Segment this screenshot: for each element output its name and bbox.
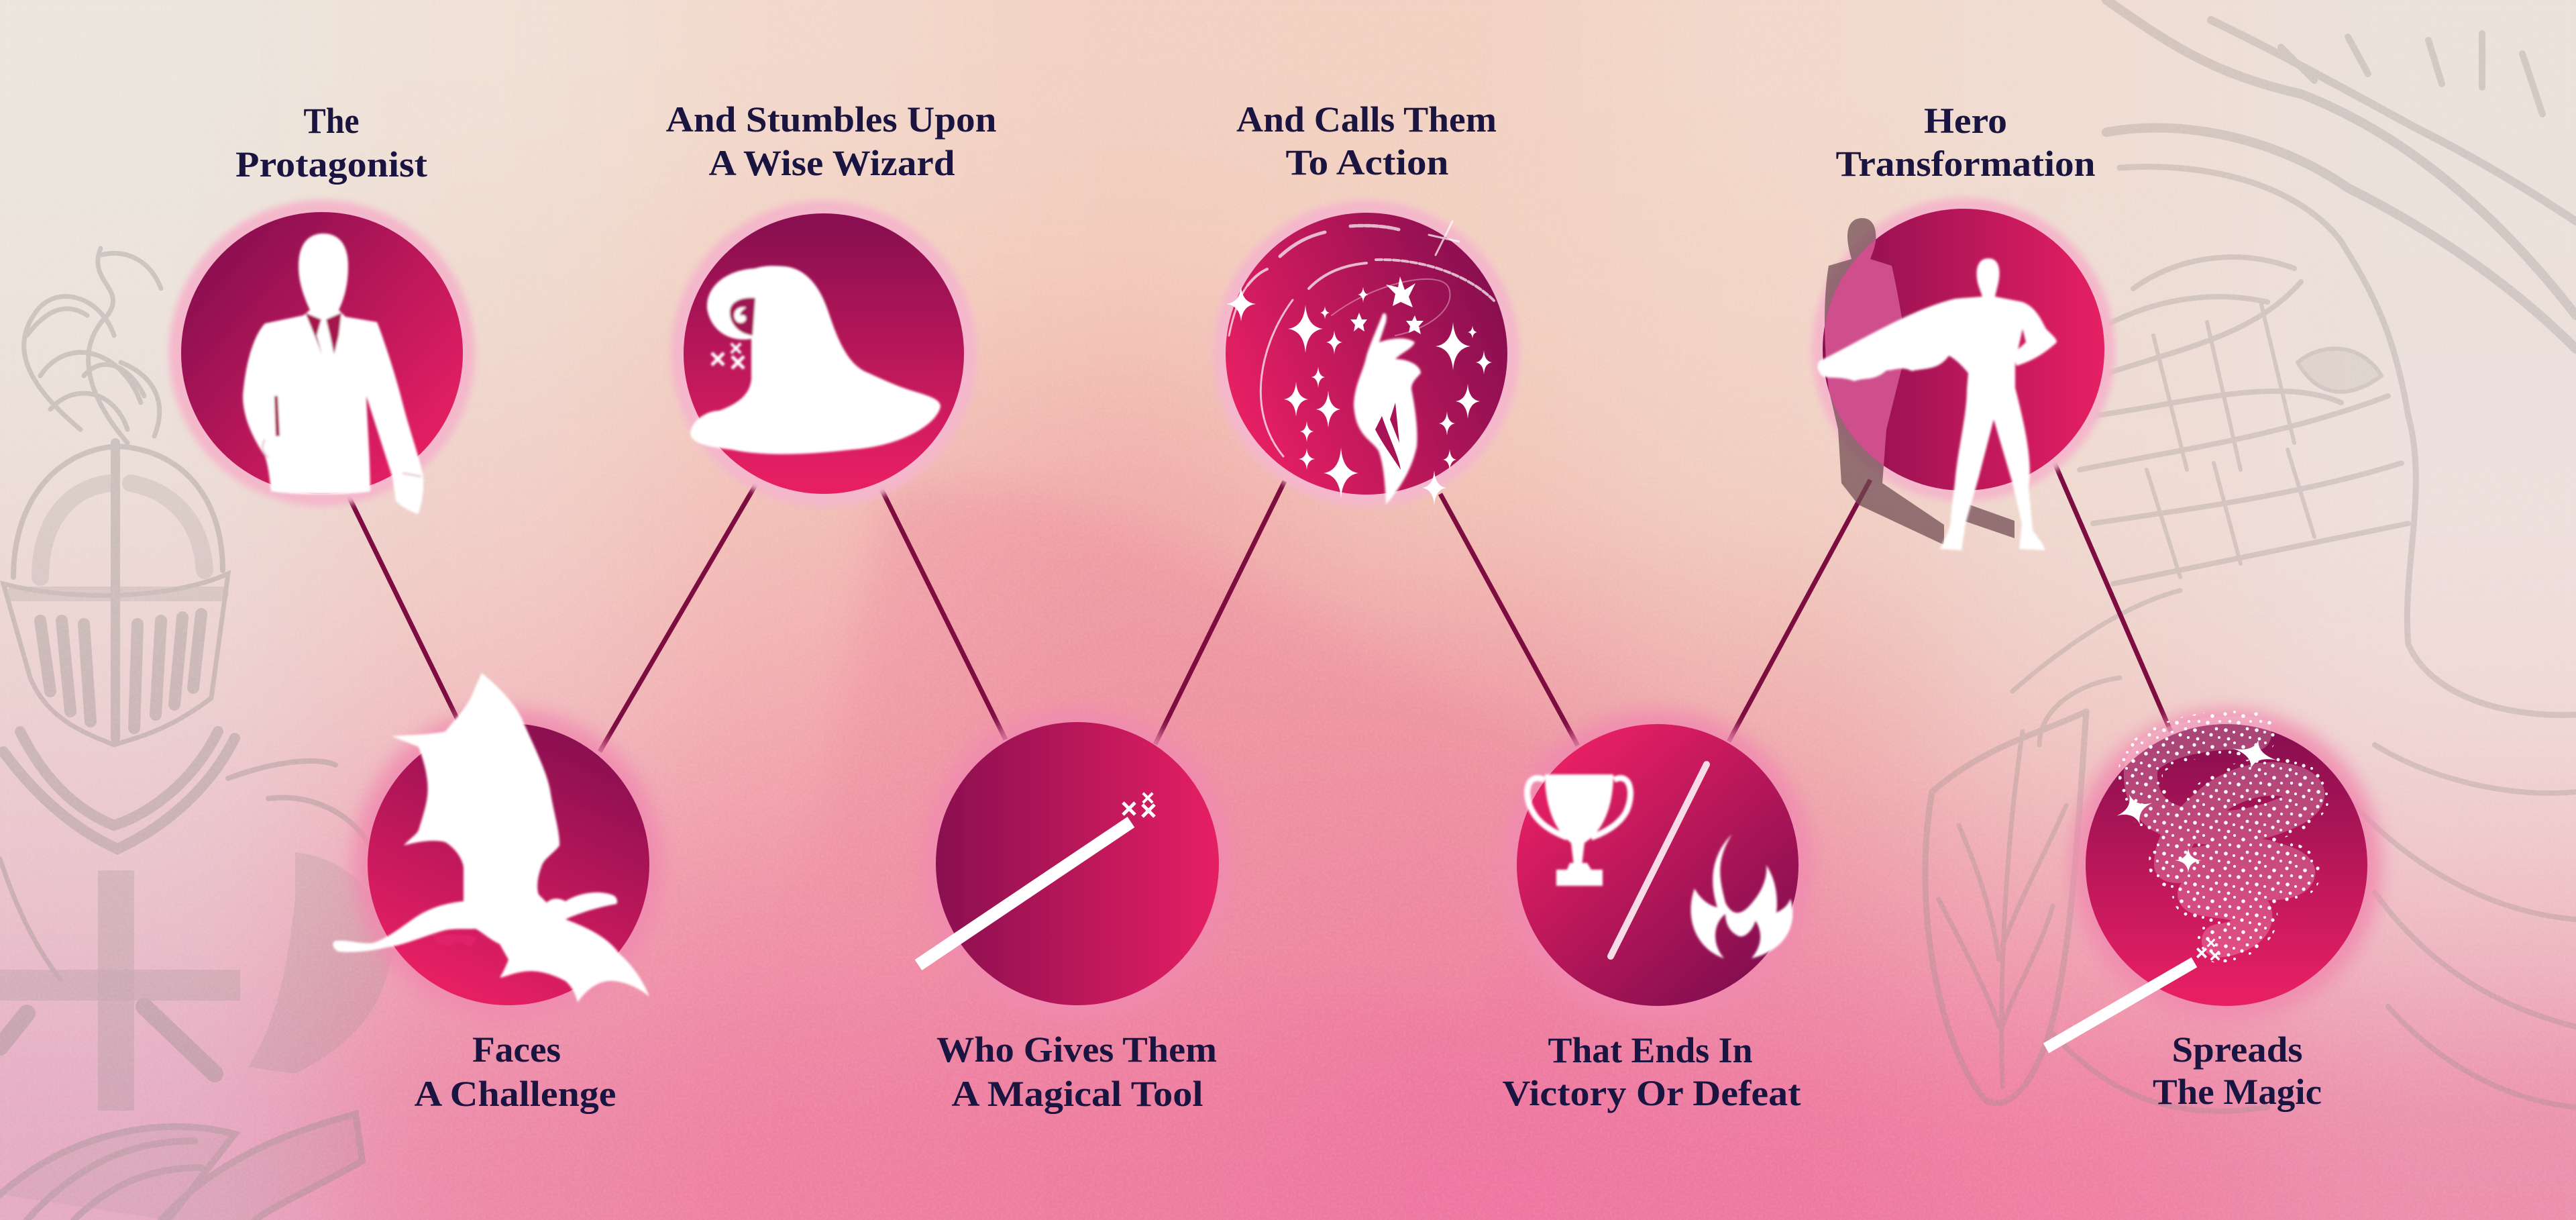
title: who gives them a magical tool: [936, 1029, 1217, 1114]
icon: flying dragon: [333, 673, 649, 1003]
title: the protagonist: The: [303, 101, 360, 141]
step 6: who gives them a magical tool: [918, 708, 1233, 1114]
background: dragon sketch: [1925, 0, 2576, 1111]
step 5: faces a challenge: [333, 673, 664, 1114]
title: that ends in victory or defeat: [1503, 1030, 1801, 1113]
title: hero transformation: Transformation: [1835, 144, 2096, 184]
icon: wizard hat: [690, 266, 941, 454]
icon: wand: [2046, 939, 2219, 1048]
circle badge: [1214, 201, 1519, 507]
title: spreads the magic: Spreads: [2172, 1029, 2302, 1070]
title: and calls them to action: To Action: [1285, 142, 1449, 183]
title: faces a challenge: A Challenge: [415, 1074, 616, 1114]
title: that ends in victory or defeat: That Ends In: [1548, 1030, 1752, 1070]
step 4: hero transformation: [1812, 101, 2115, 550]
circle badge: [353, 709, 664, 1020]
background: knight sketch: [0, 248, 392, 1220]
icon: hand with sparkles: [1226, 276, 1492, 505]
divider slash: [1611, 764, 1707, 956]
title: spreads the magic: [2153, 1029, 2322, 1112]
icon: magic wand: [918, 793, 1155, 965]
title: and calls them to action: [1236, 99, 1497, 183]
step 7: ends in victory or defeat: [1502, 709, 1813, 1113]
icon: man in suit: [243, 234, 423, 514]
circle badge: [922, 708, 1233, 1019]
icon: magic dust swirl: [2111, 733, 2308, 941]
step 8: spreads the magic: [2046, 709, 2382, 1112]
circle badge: [2071, 709, 2382, 1021]
connector lines between story beats: [347, 460, 2171, 752]
title: who gives them a magical tool: Who Gives Them: [936, 1029, 1217, 1070]
title: hero transformation: Hero: [1924, 101, 2007, 141]
title: faces a challenge: Faces: [472, 1029, 561, 1070]
icon: ordinary man's shadow: [1825, 218, 2015, 545]
icon: flames: [1690, 834, 1792, 958]
title: and stumbles upon a wise wizard: A Wise Wizard: [708, 143, 955, 183]
title: who gives them a magical tool: A Magical Tool: [951, 1074, 1203, 1114]
circle badge: [671, 201, 977, 507]
title: spreads the magic: The Magic: [2153, 1072, 2322, 1112]
icon: trophy: [1527, 774, 1630, 886]
step 2: the wise wizard: [665, 99, 997, 507]
title: hero transformation: [1835, 101, 2096, 184]
title: and stumbles upon a wise wizard: [665, 99, 997, 183]
title: the protagonist: Protagonist: [235, 144, 427, 185]
title: and stumbles upon a wise wizard: And Stumbles Upon: [665, 99, 997, 140]
step 3: call to action: [1214, 99, 1519, 507]
icon: arcs of magic: [1229, 221, 1495, 456]
circle badge: [169, 200, 475, 506]
title: that ends in victory or defeat: Victory Or Defeat: [1503, 1073, 1801, 1113]
circle badge: [1502, 709, 1813, 1021]
circle badge: [1812, 198, 2115, 501]
title: faces a challenge: [415, 1029, 616, 1114]
step 1: the protagonist: [169, 101, 475, 514]
icon: caped hero silhouette: [1817, 258, 2057, 550]
title: the protagonist: [235, 101, 427, 185]
title: and calls them to action: And Calls Them: [1236, 99, 1497, 140]
